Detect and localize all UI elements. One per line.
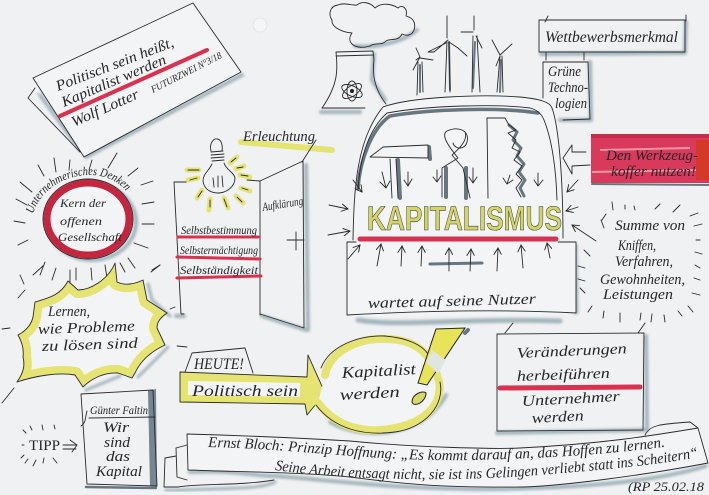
- icon: pliers: [442, 129, 470, 198]
- panel: red callout: [563, 134, 709, 185]
- icon: arrow: [63, 440, 77, 452]
- panel: Kapitalist werden: Kapitalist: [340, 361, 417, 382]
- starburst text: wie Probleme: [38, 319, 135, 338]
- signature: (RP 25.02.18: [628, 479, 705, 494]
- panel: quote banner: Seine Arbeit entsagt nicht, sie ist ins Gelingen verliebt statt ins Scheitern“: [275, 447, 696, 482]
- panel: Veränderungen: herbeiführen: [517, 366, 610, 385]
- red underline: [370, 232, 560, 234]
- open door: [260, 161, 304, 328]
- panel: Veränderungen: Unternehmer: [521, 389, 620, 410]
- heading: [241, 129, 332, 162]
- panel: book: Günter Faltin: [90, 403, 148, 417]
- panel: Summe von: Kniffen,: [617, 238, 656, 254]
- heading: Erleuchtung: [242, 129, 315, 145]
- list text: Selbstbestimmung: [181, 223, 257, 237]
- panel: Summe von: Verfahren,: [615, 254, 673, 270]
- heading tag: [185, 348, 253, 373]
- panel: red callout: koffer nutzen!: [611, 164, 696, 180]
- panel: tower and windmills: [321, 3, 512, 112]
- panel: Veränderungen: [497, 323, 647, 433]
- panel: book: sind: [104, 435, 131, 451]
- list text: [180, 223, 259, 277]
- panel: TIPP: TIPP: [29, 438, 60, 454]
- panel: book: Wir: [103, 420, 129, 436]
- red underline: [60, 50, 207, 116]
- panel: book: [81, 389, 157, 488]
- panel: Heute arrow: [180, 348, 325, 415]
- arrow: [180, 355, 325, 415]
- title: KAPITALISMUS: KAPITALISMUS: [367, 200, 562, 238]
- panel: Heute arrow: Politisch sein: [191, 383, 298, 400]
- side arrows: [328, 180, 596, 241]
- starburst text: zu lösen sind: [40, 336, 139, 355]
- panel: Heute arrow: HEUTE!: [193, 356, 244, 373]
- starburst text: [38, 304, 139, 355]
- icon: wind turbines: [413, 16, 512, 95]
- circle text: Kern der: [59, 196, 106, 210]
- caption: wartet auf seine Nutzer: [368, 292, 536, 312]
- panel: Summe von: Leistungen: [602, 287, 673, 303]
- panel: Grüne Technologien: Grüne: [548, 64, 581, 80]
- panel: red callout: Den Werkzeug-: [605, 148, 698, 164]
- up arrows: [348, 243, 550, 271]
- base: [347, 242, 576, 323]
- panel: Summe von: Summe von: [615, 218, 685, 234]
- circle text: [58, 196, 123, 244]
- red underlines: [177, 237, 261, 278]
- down arrows: [380, 168, 543, 188]
- icon: cloud: [330, 3, 417, 47]
- rays: [14, 153, 160, 282]
- quote text: FUTURZWEI N°3/18: [149, 50, 224, 96]
- icon: saw: [487, 118, 525, 198]
- panel: book: das: [106, 449, 130, 465]
- quote text: Wolf Lotter: [69, 87, 142, 131]
- panel: quote note: [28, 3, 242, 157]
- panel: TIPP: [21, 425, 77, 466]
- panel: quote banner: Ernst Bloch: Prinzip Hoffnung: „Es kommt darauf an, das Hoffen zu lernen.: [208, 437, 664, 462]
- starburst text: Lernen,: [47, 304, 90, 320]
- arc heading: Unternehmerisches Denken: [26, 166, 130, 212]
- quote text: Politisch sein heißt,: [53, 35, 176, 95]
- quote text: [53, 35, 224, 131]
- panel: Summe von: [578, 202, 702, 322]
- list text: Selbstermächtigung: [180, 243, 258, 257]
- circle text: offenen: [60, 214, 102, 228]
- panel: door with light bulb: [174, 129, 332, 330]
- panel: Wettbewerbsmerkmal: [539, 15, 686, 60]
- door frame: [174, 180, 260, 315]
- panel: Veränderungen: werden: [531, 408, 584, 427]
- panel: Kapitalist werden: werden: [339, 384, 400, 404]
- panel: Wettbewerbsmerkmal: Wettbewerbsmerkmal: [545, 29, 679, 46]
- icon: hammer: [370, 145, 430, 198]
- dome: [353, 96, 563, 240]
- panel: Grüne Technologien: logien: [555, 96, 587, 112]
- quote text: Kapitalist werden: [58, 52, 169, 111]
- panel: Grüne Technologien: [543, 62, 591, 120]
- panel: Kapitalismus vehicle: [328, 96, 596, 323]
- panel: book: Kapital: [95, 464, 142, 480]
- block arrow: [563, 145, 590, 174]
- panel: Kapitalist werden: [316, 328, 468, 433]
- panel: red circle: [14, 152, 160, 282]
- panel: starburst: [2, 263, 187, 403]
- panel: quote banner: [164, 422, 709, 492]
- icon: exclamation mark: [412, 328, 468, 404]
- list text: Selbständigkeit: [180, 263, 259, 277]
- icon: light bulb: [187, 139, 250, 210]
- circle text: Gesellschaft: [58, 230, 123, 244]
- icon: cooling tower: [321, 51, 386, 112]
- panel: Grüne Technologien: Techno-: [548, 80, 588, 96]
- panel: Summe von: Gewohnheiten,: [600, 272, 685, 288]
- door label: Aufklärung: [261, 194, 304, 214]
- panel: Veränderungen: Veränderungen: [516, 341, 627, 362]
